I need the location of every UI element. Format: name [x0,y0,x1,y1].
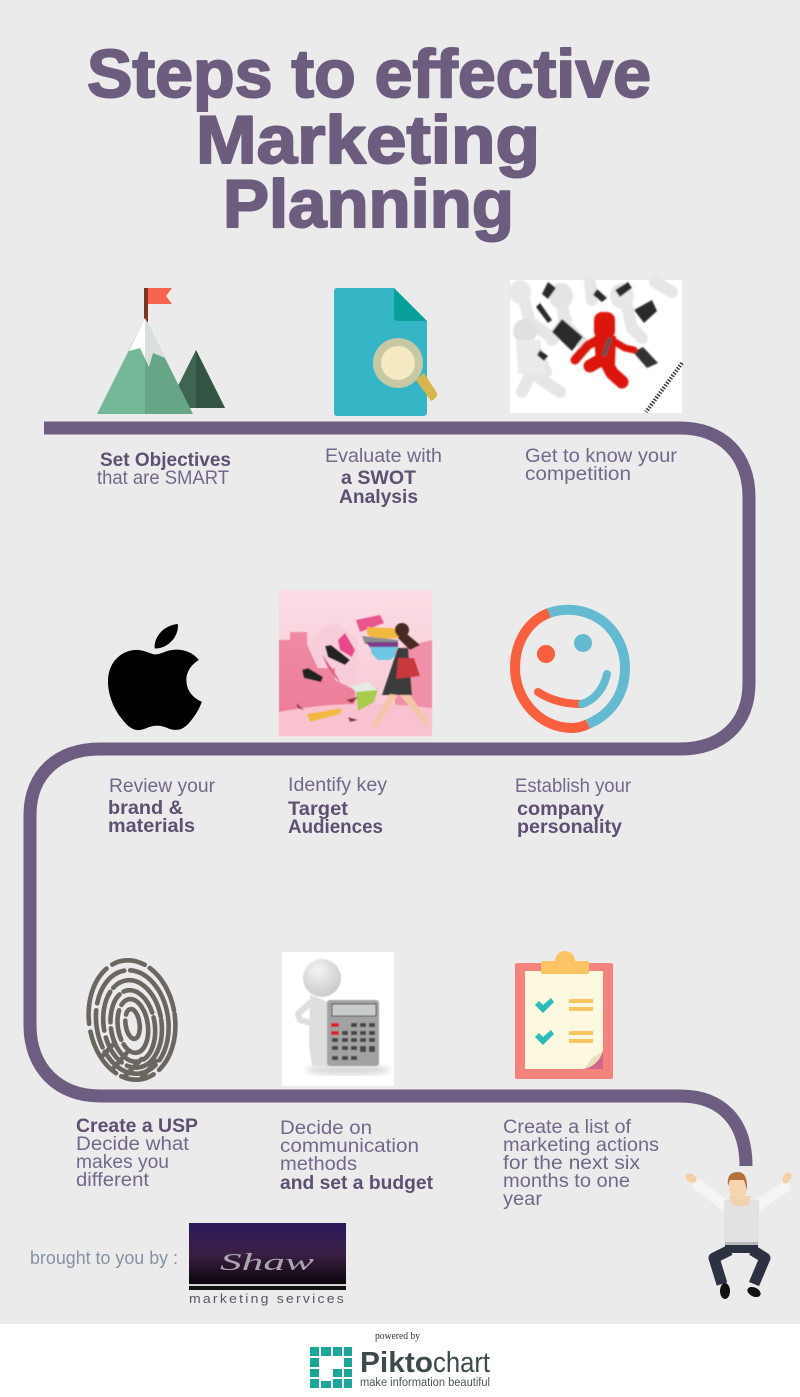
step 6 text: personality [517,817,622,838]
step 9 text: marketing actions [503,1135,659,1156]
step 2 text [325,446,442,508]
step 9 text: year [503,1189,543,1210]
step 8 text [280,1118,434,1194]
icon: mountain with flag [97,288,225,414]
step 4 text: brand & [108,798,183,819]
step 9 text: for the next six [503,1153,641,1174]
step 7 text: different [76,1170,150,1191]
icon: apple logo [108,624,202,730]
title: Planning [223,166,514,242]
powered by Piktochart [310,1331,490,1389]
step 7 text: Create a USP [76,1116,198,1137]
logo: Shaw marketing services: Shaw [220,1250,314,1276]
step 3 text: competition [525,464,631,485]
step 3 text: Get to know your [525,446,678,467]
powered by Piktochart: chart [433,1347,490,1379]
step 5 text [288,775,388,838]
powered by Piktochart: powered by [375,1331,420,1342]
icon: smiley face [515,610,625,728]
title: Steps to effective [87,36,651,112]
step 1 text [97,450,231,489]
step 8 text: methods [280,1154,357,1175]
step 8 text: Decide on [280,1118,372,1139]
step 2 text: Evaluate with [325,446,442,467]
step 9 text: months to one [503,1171,630,1192]
footer band [0,1324,800,1397]
step 4 text [108,776,216,837]
step 1 text: that are SMART [97,468,229,489]
winding path connecting the steps [30,428,749,1166]
image: woman carrying shopping boxes [279,590,432,736]
icon: document with magnifier [334,288,437,416]
image: 3D figure with calculator [282,952,394,1086]
step 5 text: Identify key [288,775,388,796]
step 8 text: communication [280,1136,419,1157]
powered by Piktochart: make information beautiful [360,1377,490,1389]
step 4 text: Review your [109,776,216,797]
logo: Shaw marketing services: marketing services [189,1292,346,1306]
image: red figure leading a crowd [509,280,682,413]
step 6 text: Establish your [515,776,632,797]
step 5 text: Audiences [288,817,383,838]
icon: jumping man [684,1171,793,1299]
step 4 text: materials [108,816,195,837]
step 7 text [76,1116,198,1191]
step 6 text: company [517,799,604,820]
step 7 text: makes you [76,1152,169,1173]
step 8 text: and set a budget [280,1173,434,1194]
step 9 text [503,1117,659,1210]
icon: clipboard checklist [515,951,613,1079]
step 1 text: Set Objectives [100,450,231,471]
step 5 text: Target [288,799,349,820]
step 6 text [515,776,632,838]
step 2 text: a SWOT [341,468,416,489]
step 9 text: Create a list of [503,1117,632,1138]
icon: fingerprint [81,955,183,1085]
title: Marketing [196,102,540,178]
title [87,36,651,242]
brought to you by label: brought to you by : [30,1248,178,1268]
step 2 text: Analysis [339,487,418,508]
powered by Piktochart: Pikto [360,1347,433,1379]
logo: Shaw marketing services [189,1223,346,1306]
step 7 text: Decide what [76,1134,190,1155]
step 3 text [525,446,678,485]
